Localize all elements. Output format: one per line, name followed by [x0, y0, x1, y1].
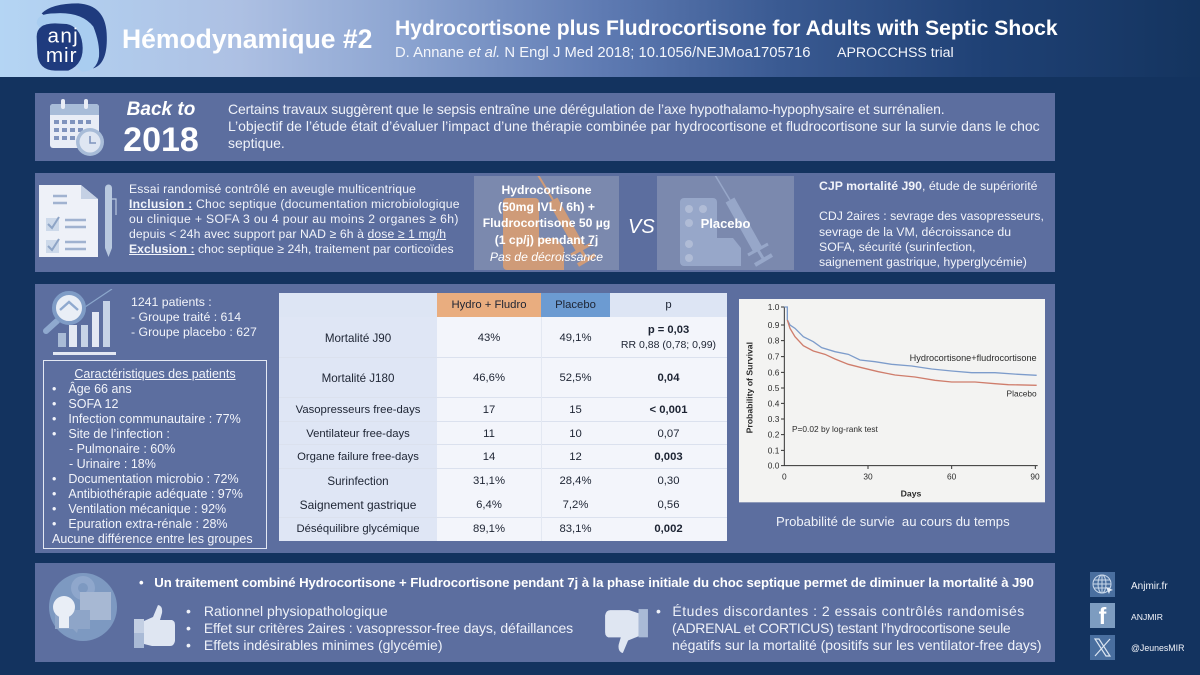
row: déséquilibre: [296, 522, 683, 534]
text: study rationale: Certains travaux suggèrent que le sepsis entraîne une dérégulation de l’axe hypothalamo-hypophysaire et surrénalien.: [228, 101, 945, 117]
row: déséquilibre: Déséquilibre glycémique: [296, 522, 420, 534]
list: characteristics: • Infection communautaire : 77%: [52, 412, 241, 426]
row: mortalité J90: p = 0,03: [648, 324, 689, 336]
survival chart: Hydrocortisone+fludrocortisone: [910, 353, 1037, 363]
survival chart: 90: [1030, 472, 1040, 482]
icon: idea circle: [49, 573, 117, 641]
list: arguments against: négatifs sur la mortalité (positifs sur les ventilator-free days): [672, 637, 1042, 653]
row: organe failure: 14: [483, 450, 495, 462]
icon: thumbs up: [134, 605, 175, 648]
icon: analytics magnifier: [43, 289, 116, 355]
list: characteristics: - Pulmonaire : 60%: [69, 442, 175, 456]
text: inclusion and exclusion criteria: Exclusion : choc septique ≥ 24h, traitement par corticoïdes: [129, 242, 454, 256]
icon: thumbs down: [605, 609, 648, 653]
survival chart: Days: [901, 488, 922, 498]
list: arguments against: [656, 603, 1042, 653]
back to 2018 label: Back to: [127, 99, 195, 120]
list: characteristics: • Site de l’infection :: [52, 427, 170, 441]
row: saignement: 6,4%: [476, 498, 502, 510]
row: ventilateur: Ventilateur free-days: [306, 428, 410, 440]
survival chart: P=0.02 by log-rank test: [792, 424, 879, 434]
survival chart: 0.8: [768, 336, 780, 346]
text: inclusion and exclusion criteria: Essai randomisé contrôlé en aveugle multicentrique: [129, 182, 416, 196]
logo: anj: [48, 25, 79, 48]
list: characteristics: • SOFA 12: [52, 397, 118, 411]
row: mortalité J90: 49,1%: [559, 332, 592, 344]
row: vasopresseurs: Vasopresseurs free-days: [296, 404, 420, 416]
row: mortalité J90: [325, 324, 716, 351]
text: treatment regimen: [483, 183, 610, 264]
header: placebo: [541, 293, 610, 317]
list: characteristics: [52, 382, 253, 546]
text: patient counts: [131, 295, 257, 339]
row: déséquilibre: 89,1%: [473, 522, 505, 534]
text: patient counts: - Groupe placebo : 627: [131, 325, 257, 339]
label: @JeunesMIR: [1131, 643, 1184, 653]
text: treatment regimen: Hydrocortisone: [501, 183, 592, 197]
text: study endpoints: saignement gastrique, hyperglycémie): [819, 255, 1027, 269]
survival chart: 0.4: [768, 398, 780, 408]
text: study endpoints: CJP mortalité J90, étude de supériorité: [819, 179, 1038, 193]
row: saignement: 7,2%: [563, 498, 588, 510]
header: placebo: Placebo: [555, 298, 596, 310]
icon: orange medication: [503, 176, 596, 270]
list: arguments against: (ADRENAL et CORTICUS) testant l’hydrocortisone seule: [672, 620, 1010, 636]
text: study rationale: L’objectif de l’étude était d’évaluer l’impact d’une thérapie combinée par hydrocortisone et fludrocortisone sur la survie dans le choc: [228, 118, 1040, 134]
header: p: p: [665, 298, 672, 310]
chart caption: Probabilité de survie au cours du temps: [776, 514, 1010, 529]
row: saignement: Saignement gastrique: [300, 498, 416, 512]
row: organe failure: Organe failure free-days: [297, 450, 419, 462]
row: mortalité J90: Mortalité J90: [325, 332, 391, 344]
text: treatment regimen: (1 cp/j) pendant 7j: [495, 233, 598, 247]
text: treatment regimen: Fludrocortisone 50 µg: [483, 216, 610, 230]
icon: pills and syringe: [680, 176, 773, 266]
list: arguments for: • Effets indésirables minimes (glycémie): [186, 637, 443, 653]
row: mortalité J180: 0,04: [658, 372, 680, 384]
link: x account: [1090, 635, 1184, 660]
text: inclusion and exclusion criteria: [129, 182, 460, 256]
row: surinfection: [327, 474, 680, 488]
header: hydro + fludro: Hydro + Fludro: [451, 298, 527, 310]
list: characteristics: • Âge 66 ans: [52, 382, 132, 396]
panel: background: [35, 93, 1055, 161]
text: inclusion and exclusion criteria: ou clinique + SOFA 3 ou 4 pour au moins 2 organes ≥ 6h): [129, 212, 459, 226]
header: hydro + fludro: [437, 293, 541, 317]
panel: results: [35, 284, 1055, 553]
list: arguments for: [186, 603, 573, 653]
row: mortalité J180: 52,5%: [559, 372, 592, 384]
logo: [36, 3, 107, 72]
survival chart: 0.3: [768, 414, 780, 424]
icon: calendar: [50, 99, 104, 156]
panel: conclusion: [35, 563, 1055, 662]
row: surinfection: 0,30: [658, 474, 680, 486]
row: vasopresseurs: < 0,001: [649, 404, 688, 416]
row: mortalité J90: RR 0,88 (0,78; 0,99): [621, 339, 716, 351]
row: vasopresseurs: 17: [483, 404, 495, 416]
survival chart: 0.1: [768, 445, 780, 455]
row: ventilateur: 0,07: [658, 428, 680, 440]
placebo arm box: [657, 176, 794, 270]
list: characteristics: - Urinaire : 18%: [69, 457, 156, 471]
row: surinfection: Surinfection: [327, 474, 389, 488]
row: vasopresseurs: [296, 404, 688, 416]
heading: trial title: Hydrocortisone plus Fludrocortisone for Adults with Septic Shock: [395, 17, 1058, 40]
list: arguments against: • Études discordantes : 2 essais contrôlés randomisés: [656, 603, 1025, 619]
back to 2018 label: 2018: [123, 121, 199, 159]
reference line: D. Annane et al. N Engl J Med 2018; 10.1056/NEJMoa1705716: [395, 45, 810, 61]
box: patient characteristics: [43, 360, 267, 549]
survival chart: Probability of Survival: [744, 342, 754, 433]
text: patient counts: 1241 patients :: [131, 295, 212, 309]
row: ventilateur: 11: [483, 428, 495, 440]
icon: facebook: [1090, 603, 1115, 628]
list: characteristics: • Antibiothérapie adéquate : 97%: [52, 487, 243, 501]
label: Anjmir.fr: [1131, 581, 1168, 592]
row: déséquilibre: 0,002: [654, 522, 683, 534]
row: surinfection: 28,4%: [559, 474, 592, 486]
survival chart: 0.6: [768, 367, 780, 377]
row: déséquilibre: 83,1%: [559, 522, 592, 534]
row: mortalité J180: 46,6%: [473, 372, 505, 384]
icon: x: [1090, 635, 1115, 660]
text: inclusion and exclusion criteria: depuis < 24h avec support par NAD ≥ 6h à dose ≥ 1 mg/h: [129, 227, 446, 241]
row: mortalité J90: 43%: [478, 332, 500, 344]
text: study endpoints: SOFA, sécurité (surinfection,: [819, 240, 976, 254]
row: ventilateur: [306, 428, 680, 440]
list: characteristics: • Documentation microbio : 72%: [52, 472, 239, 486]
survival chart: [739, 299, 1045, 502]
table header row: [279, 293, 727, 317]
row: mortalité J180: [322, 372, 680, 384]
heading: section title: Hémodynamique #2: [122, 24, 372, 54]
row: saignement: [300, 498, 680, 512]
survival chart: 0.2: [768, 430, 780, 440]
list: characteristics: • Epuration extra-rénale : 28%: [52, 517, 228, 531]
row: saignement: 0,56: [658, 498, 680, 510]
treatment arm box: [474, 176, 619, 270]
text: main conclusion: • Un traitement combiné Hydrocortisone + Fludrocortisone pendant 7j à la phase initiale du choc septique permet de diminuer la mortalité à J90: [139, 575, 1034, 590]
survival chart: 60: [947, 472, 957, 482]
text: study rationale: septique.: [228, 135, 285, 151]
survival chart: 0.7: [768, 352, 780, 362]
text: study endpoints: sevrage de la VM, décroissance du: [819, 225, 1011, 239]
results table: [279, 293, 727, 541]
survival chart: 0.0: [768, 461, 780, 471]
text: study endpoints: [819, 179, 1044, 269]
list: characteristics: • Ventilation mécanique : 92%: [52, 502, 226, 516]
row: ventilateur: 10: [569, 428, 582, 440]
header band: [0, 0, 1200, 77]
text: placebo: Placebo: [701, 216, 750, 231]
row: organe failure: 0,003: [654, 450, 683, 462]
survival chart: Placebo: [1007, 389, 1037, 399]
panel: study design: [35, 173, 1055, 272]
survival chart: 0.5: [768, 383, 780, 393]
reference line: APROCCHSS trial: [837, 45, 954, 61]
heading: characteristics: Caractéristiques des patients: [74, 367, 236, 381]
list: arguments for: • Rationnel physiopathologique: [186, 603, 388, 619]
text: study rationale: [228, 101, 1040, 151]
text: treatment regimen: (50mg IVL / 6h) +: [498, 200, 595, 214]
first column shade: [279, 293, 437, 541]
text: treatment regimen: Pas de décroissance: [490, 250, 603, 264]
row: vasopresseurs: 15: [569, 404, 582, 416]
link: facebook: [1090, 603, 1163, 628]
survival chart: 0.9: [768, 320, 780, 330]
list: arguments for: • Effet sur critères 2aires : vasopressor-free days, défaillances: [186, 620, 573, 636]
vs label: VS: [628, 216, 655, 238]
survival chart: 0: [782, 472, 787, 482]
survival chart: 30: [863, 472, 873, 482]
icon: globe: [1090, 572, 1115, 597]
row: organe failure: [297, 450, 683, 462]
row: surinfection: 31,1%: [473, 474, 505, 486]
list: characteristics: Aucune différence entre les groupes: [52, 532, 253, 546]
back to 2018 label: [123, 99, 199, 159]
logo: mir: [46, 44, 78, 67]
row: mortalité J180: Mortalité J180: [322, 372, 394, 384]
label: ANJMIR: [1131, 612, 1163, 622]
text: inclusion and exclusion criteria: Inclusion : Choc septique (documentation microbiologique: [129, 197, 460, 211]
survival chart: 1.0: [768, 302, 780, 312]
text: study endpoints: CDJ 2aires : sevrage des vasopresseurs,: [819, 209, 1044, 223]
icon: checklist document: [39, 184, 117, 257]
text: patient counts: - Groupe traité : 614: [131, 310, 241, 324]
row: organe failure: 12: [569, 450, 582, 462]
link: website: [1090, 572, 1168, 597]
